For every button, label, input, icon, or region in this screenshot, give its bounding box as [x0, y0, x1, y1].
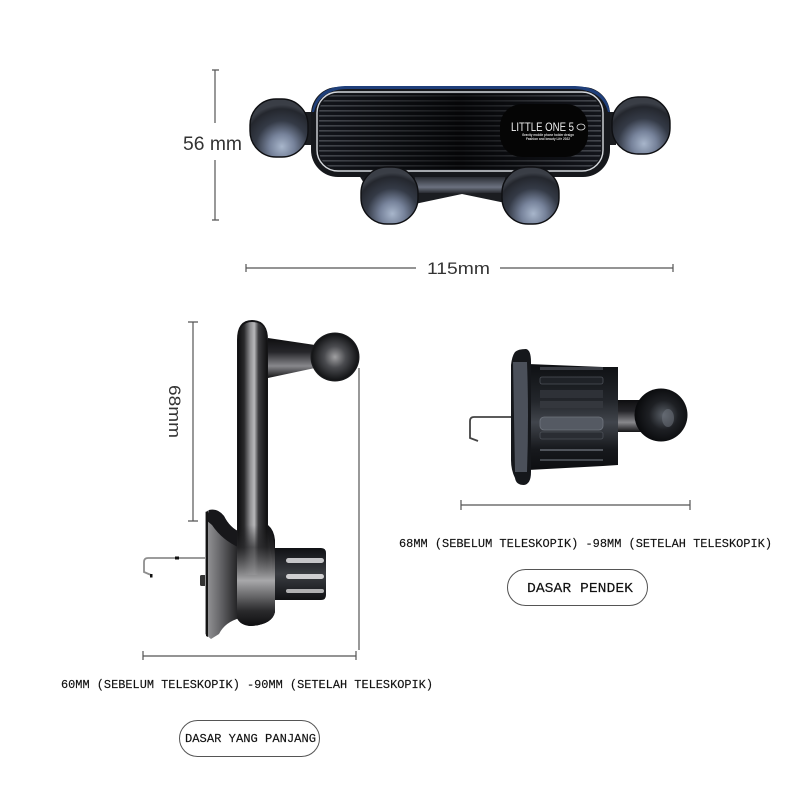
badge: long base — [180, 720, 320, 756]
badge: long base: DASAR YANG PANJANG — [185, 732, 316, 746]
width dimension: short base — [461, 500, 690, 510]
width dimension: 115mm — [246, 259, 673, 278]
width dimension: long base — [143, 368, 359, 660]
badge: short base — [508, 570, 648, 606]
arm neck — [268, 338, 315, 378]
height dimension: 56 mm — [183, 70, 242, 220]
brand label — [500, 104, 588, 157]
hook wire — [470, 417, 512, 441]
knurled barrel — [528, 364, 618, 470]
base flange — [511, 349, 531, 485]
ball joint — [310, 332, 360, 382]
dimension: 68mm — [165, 322, 198, 521]
grip ball: bottom left — [361, 167, 418, 224]
suction base — [205, 510, 240, 639]
brand label: Gravity mobile phone holder design — [522, 133, 574, 137]
grip ball: bottom right — [502, 167, 559, 224]
width dimension: 115mm: 115mm — [427, 259, 490, 278]
dimension: 68mm: 68mm — [165, 385, 184, 438]
grip ball: left — [250, 99, 308, 157]
neck — [618, 400, 642, 432]
long arm — [237, 320, 275, 626]
front view: phone holder — [250, 86, 670, 224]
holder bridge — [357, 172, 548, 205]
holder body — [311, 86, 610, 177]
badge: short base: DASAR PENDEK — [527, 581, 634, 597]
grip ball: right — [612, 97, 670, 154]
knob — [272, 548, 326, 600]
side view: long base mount — [144, 320, 360, 639]
caption: short base: 68MM (SEBELUM TELESKOPIK) -98MM (SETELAH TELESKOPIK) — [399, 537, 772, 551]
height dimension: 56 mm: 56 mm — [183, 134, 242, 155]
holder connectors — [304, 112, 616, 145]
side view: short base mount — [470, 349, 688, 485]
hook wire — [144, 558, 205, 575]
ball joint — [634, 388, 688, 442]
brand label: LITTLE ONE 5 — [511, 120, 574, 134]
brand label: Fashion and beauty Life 2022 — [526, 137, 570, 141]
caption: long base: 60MM (SEBELUM TELESKOPIK) -90MM (SETELAH TELESKOPIK) — [61, 678, 433, 692]
